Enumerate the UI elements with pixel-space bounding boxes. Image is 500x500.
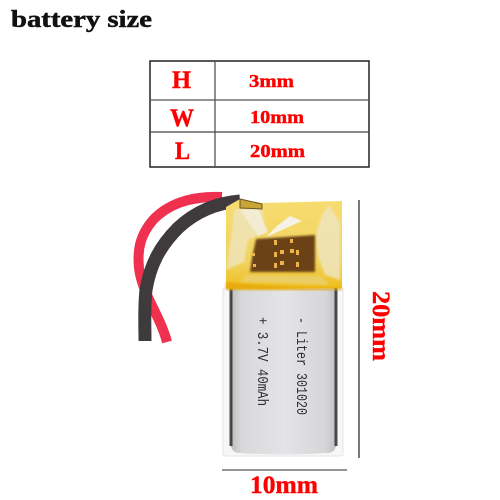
battery illustration [139,197,343,456]
dimensions table [150,61,369,167]
model line: - Liter 301020 [292,317,309,415]
row: height [172,67,294,94]
red wire [139,197,222,342]
horizontal dimension: 10mm: 10mm [250,472,318,499]
battery label [253,317,309,415]
voltage line: + 3.7V 40mAh [253,317,270,406]
row: width: 10mm [250,107,304,127]
metal tab [240,199,262,209]
row: width [170,105,304,132]
title: battery size [11,7,152,33]
horizontal dimension: 10mm [222,470,347,499]
row: width: W [170,105,194,132]
row: length [175,138,305,165]
row: length: L [175,138,190,165]
row: height: H [172,67,192,94]
battery side flanges [223,288,343,456]
silver body [230,288,338,454]
black wire [145,201,240,341]
vertical dimension: 20mm: 20mm [367,291,394,361]
row: length: 20mm [250,141,305,161]
row: height: 3mm [249,71,294,91]
protection circuit board [250,235,315,272]
yellow tape top [226,199,342,290]
